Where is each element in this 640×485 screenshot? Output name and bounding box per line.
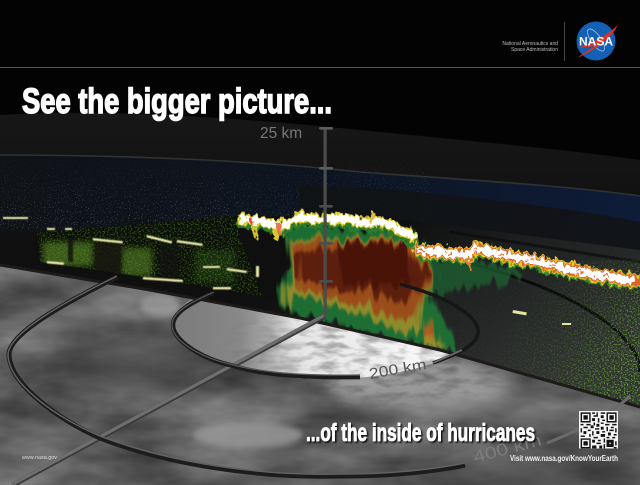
dark gaps between swaths — [68, 238, 178, 280]
ring label: 400 km: 400 km — [471, 430, 544, 467]
dark area of clouds — [60, 335, 200, 395]
QR code — [579, 411, 618, 448]
ring: 200 km — [172, 284, 478, 377]
site credit: www.nasa.gov — [21, 455, 57, 461]
left wall: green cloud returns — [37, 216, 261, 296]
agency name: National Aeronautics and — [502, 41, 558, 47]
hurricane outer bands — [325, 359, 515, 411]
olive transition — [281, 238, 446, 348]
dark earth limb on right — [300, 186, 640, 262]
title: See the bigger picture... — [22, 82, 332, 121]
storm curtain: radar cross-section — [276, 224, 525, 350]
atmosphere band — [0, 113, 640, 300]
lighter cloud mass — [193, 422, 303, 448]
agency name: Space Administration — [511, 47, 558, 53]
hurricane bright core — [175, 299, 450, 379]
pale cloud near back edge — [140, 293, 180, 317]
header divider — [564, 22, 565, 61]
green outer echo — [276, 224, 525, 350]
satellite cloud image plane — [0, 260, 640, 485]
subtitle: ...of the inside of hurricanes — [306, 419, 535, 447]
dark red-brown core — [296, 243, 428, 304]
orange-brown — [292, 240, 435, 340]
header rule — [0, 67, 640, 68]
icon: NASA meatball logo: NASA — [579, 36, 613, 48]
plane back edge — [0, 265, 640, 407]
agency name — [502, 41, 558, 53]
star speckle over sky — [0, 160, 430, 230]
floor green speckle on right — [429, 255, 640, 405]
hurricane feathering — [242, 315, 502, 408]
radial scale bar — [13, 315, 325, 485]
ring label: 200 km: 200 km — [368, 356, 428, 383]
ring: 400 km — [8, 276, 630, 476]
left wall: yellow-white cloud tops — [3, 217, 259, 289]
dark wall and floor behind the storm — [0, 216, 640, 410]
bright green patches — [43, 242, 235, 282]
storm top: white and yellow cloud tops — [243, 213, 640, 285]
icon: NASA meatball logo — [576, 22, 618, 60]
altitude scale pole — [319, 127, 333, 318]
altitude label: 25 km — [260, 125, 302, 142]
